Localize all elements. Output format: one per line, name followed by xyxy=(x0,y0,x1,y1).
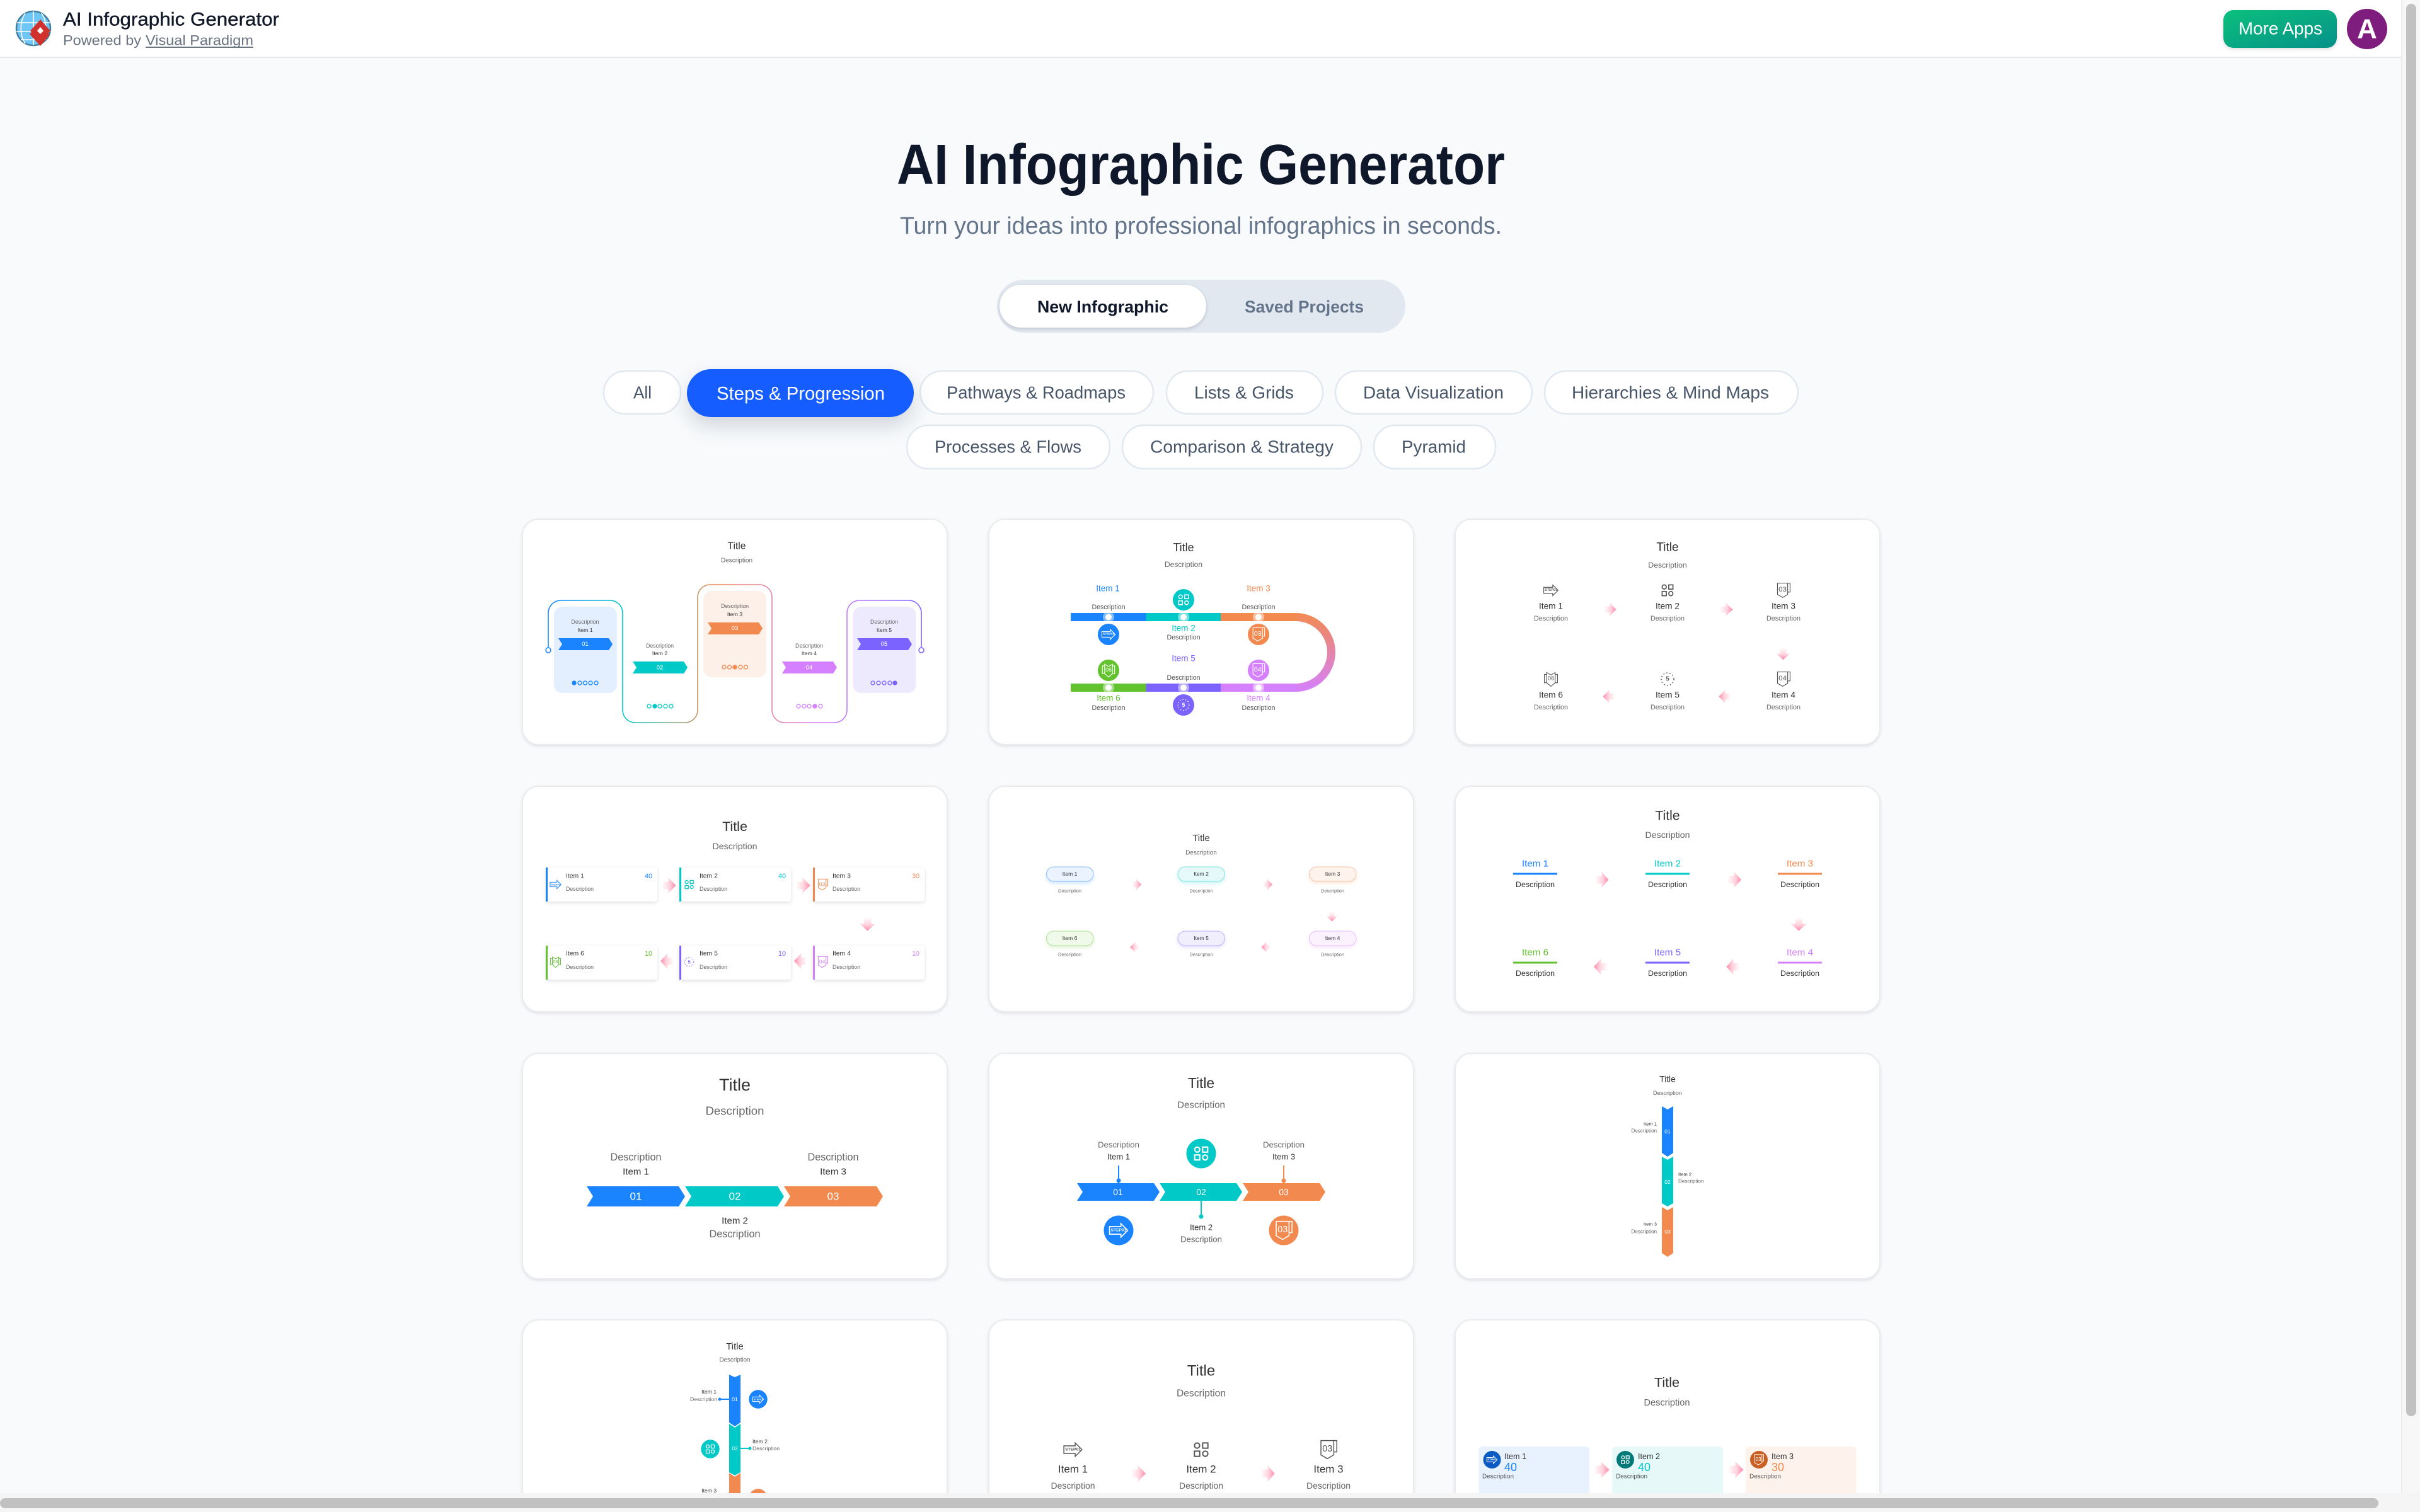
chip: Data Visualization xyxy=(1335,371,1532,414)
panel: template 1 serpentine cards xyxy=(522,519,947,745)
item labels: Item 4 xyxy=(1247,693,1270,703)
mini card: item 3: Description xyxy=(833,886,860,892)
step 1: 01 xyxy=(582,641,589,648)
panel: template 8 chevrons with icons xyxy=(989,1053,1414,1279)
step 1 xyxy=(558,619,613,685)
mini card: item 6: Item 6 xyxy=(566,950,584,958)
item 2 label: Description xyxy=(710,1228,760,1240)
icon: 03 badge: 03 xyxy=(1254,630,1262,638)
pill: item 6 xyxy=(1046,931,1093,958)
template title: Title xyxy=(1192,833,1210,844)
item 3: Item 3 xyxy=(1787,858,1813,869)
item 1 label: Description xyxy=(1631,1128,1657,1134)
step 1: Item 1 xyxy=(577,627,593,633)
metric card: item 2: Description xyxy=(1616,1473,1647,1480)
template description: Description xyxy=(1165,560,1202,569)
powered by line: Visual Paradigm xyxy=(146,33,253,48)
mini card: item 1: Description xyxy=(566,886,594,892)
mini card: item 4: Description xyxy=(833,964,860,970)
item labels: Item 3 xyxy=(1772,601,1795,611)
item 2 label xyxy=(740,1438,780,1452)
step 3: 03 xyxy=(732,625,738,632)
template title: Title xyxy=(719,1075,751,1094)
step 2: Item 2 xyxy=(652,650,667,656)
icon: app logo globe xyxy=(16,11,50,46)
item 1 label: Description xyxy=(611,1152,661,1163)
icon: grid badge xyxy=(1173,589,1194,610)
pill: item 2: Item 2 xyxy=(1194,871,1209,877)
mini card: item 1 xyxy=(546,868,657,902)
item 3: Description xyxy=(1780,880,1819,889)
chevron row: 03 xyxy=(827,1191,839,1202)
item 3 label: Description xyxy=(1631,1228,1657,1235)
mini card: item 1: 40 xyxy=(645,873,652,880)
chevron row xyxy=(1077,1183,1325,1201)
metric card: item 2 xyxy=(1612,1446,1723,1503)
more apps button: More Apps xyxy=(2238,19,2322,38)
horizontal scrollbar xyxy=(0,1493,2420,1512)
icon: step badge: STEP01 xyxy=(1111,1228,1127,1232)
vertical chevron column xyxy=(729,1375,740,1512)
item 2 label: Description xyxy=(1678,1178,1704,1184)
icon: 5 dashed badge: 5 xyxy=(1182,702,1185,708)
item 2 label: Item 2 xyxy=(1678,1172,1691,1177)
panel: template 9 vertical chevrons xyxy=(1455,1053,1880,1279)
item 1 label: Item 1 xyxy=(701,1389,717,1395)
chip: Pathways & Roadmaps: Pathways & Roadmaps xyxy=(947,383,1126,402)
inner tinted panels xyxy=(554,591,916,693)
item labels: Item 5 xyxy=(1172,654,1196,663)
panel: template 11 icon row xyxy=(989,1320,1414,1512)
item labels: Item 3 xyxy=(1247,583,1270,593)
item 1 callout xyxy=(1098,1140,1139,1183)
metric card: item 3: 03 xyxy=(1755,1457,1761,1462)
mini card: item 6: 06 xyxy=(553,959,558,965)
icon: 06 badge xyxy=(1098,660,1119,681)
icon: 03 badge xyxy=(1777,583,1790,597)
pill: item 3 xyxy=(1310,867,1356,893)
panel: template 4 bar cards with values xyxy=(522,786,947,1012)
chip: Pyramid xyxy=(1374,425,1495,469)
template title: Title xyxy=(1173,541,1194,554)
item 1 label xyxy=(690,1389,729,1402)
item 3 xyxy=(1306,1441,1351,1491)
icon: 03 badge xyxy=(1269,1216,1298,1245)
template description: Description xyxy=(705,1104,764,1118)
item labels: Description xyxy=(1651,704,1685,711)
item 3 label xyxy=(1631,1221,1657,1235)
icon: grid badge xyxy=(701,1440,720,1458)
item labels: Description xyxy=(1534,615,1568,622)
panel: template 12 tinted metric cards xyxy=(1455,1320,1880,1512)
icon: 5 dashed: 5 xyxy=(1666,675,1669,683)
step 3: Item 3 xyxy=(727,611,742,617)
icon: step arrow badge xyxy=(1098,624,1119,645)
pill: item 4: Description xyxy=(1321,951,1344,958)
pill: item 4: Item 4 xyxy=(1325,935,1340,941)
step 2: Description xyxy=(646,643,674,649)
item 1 callout: Item 1 xyxy=(1107,1152,1130,1162)
template title: Title xyxy=(728,541,746,552)
item 3: Description xyxy=(1306,1480,1351,1491)
template description: Description xyxy=(1644,1398,1690,1408)
metric card: item 1: STEP01 xyxy=(1488,1458,1496,1461)
vertical chevron column: 02 xyxy=(732,1445,738,1452)
item 5: Item 5 xyxy=(1654,948,1681,958)
chevron row: 01 xyxy=(1113,1187,1123,1197)
pill: item 6: Item 6 xyxy=(1063,935,1078,941)
metric card: item 2: Item 2 xyxy=(1638,1452,1660,1461)
item labels: Description xyxy=(1766,615,1801,622)
item 3 callout xyxy=(1263,1140,1305,1183)
chip: Processes & Flows: Processes & Flows xyxy=(935,437,1081,456)
mini card: item 5: Description xyxy=(700,964,727,970)
metric card: item 3: Item 3 xyxy=(1772,1452,1794,1461)
item labels: Description xyxy=(1092,704,1126,712)
vertical chevron column xyxy=(1662,1106,1673,1257)
mini card: item 2: Item 2 xyxy=(700,873,718,879)
item 1 xyxy=(1513,858,1557,889)
powered by line xyxy=(63,33,253,48)
chip: Steps & Progression active xyxy=(687,369,914,417)
chip: All xyxy=(604,371,681,414)
icon: 03 badge xyxy=(749,1489,768,1508)
item labels: Description xyxy=(1651,615,1685,622)
icon: 06 badge: 06 xyxy=(1105,667,1112,673)
item 3 callout: Item 3 xyxy=(1272,1152,1295,1162)
tab switcher: Saved Projects xyxy=(1245,297,1364,316)
chip: Pathways & Roadmaps xyxy=(920,371,1153,414)
category filter chips xyxy=(604,369,1798,469)
icon: step arrow: STEP01 xyxy=(1545,588,1557,592)
icon: 03 badge: 03 xyxy=(1778,586,1787,593)
metric card: item 2: 40 xyxy=(1638,1461,1651,1474)
item labels: Description xyxy=(1167,634,1201,641)
arrows between items xyxy=(1131,1466,1274,1481)
mini card: item 2 xyxy=(679,868,791,902)
item 3 label xyxy=(808,1152,858,1177)
vertical chevron column: 01 xyxy=(732,1396,738,1402)
chip: Comparison & Strategy: Comparison & Strategy xyxy=(1150,437,1334,456)
step 2 xyxy=(633,643,688,708)
pill: item 3: Description xyxy=(1321,888,1344,893)
item 2: Item 2 xyxy=(1186,1463,1216,1475)
mini card: item 3: 30 xyxy=(912,873,919,880)
pill: item 3: Item 3 xyxy=(1325,871,1340,877)
arrows between cards xyxy=(1594,1462,1743,1477)
item 4: Item 4 xyxy=(1787,948,1813,958)
icon: 04 badge xyxy=(1248,660,1269,681)
item 1 label xyxy=(1631,1121,1657,1134)
item 1 label: Item 1 xyxy=(623,1167,649,1177)
mini card: item 1: STEP01 xyxy=(551,883,561,886)
arrows between cards xyxy=(660,878,875,968)
item labels: Description xyxy=(1766,704,1801,711)
item labels: Item 1 xyxy=(1539,601,1563,611)
template description: Description xyxy=(713,842,757,852)
template title: Title xyxy=(722,819,747,834)
vertical chevron column: 03 xyxy=(1664,1228,1671,1235)
step 4: Item 4 xyxy=(802,650,817,656)
chip: Pyramid: Pyramid xyxy=(1402,437,1466,456)
step 1: Description xyxy=(571,619,599,625)
step 4 xyxy=(782,643,837,708)
step 5: 05 xyxy=(881,641,887,648)
pill: item 5: Description xyxy=(1190,951,1213,958)
metric card: item 1: Item 1 xyxy=(1504,1452,1526,1461)
U-shaped coloured track xyxy=(1071,611,1331,693)
mini card: item 2: 40 xyxy=(778,873,786,880)
item labels: Description xyxy=(1092,604,1126,611)
item labels: Description xyxy=(1534,704,1568,711)
icon: step badge: STEP01 xyxy=(754,1398,763,1400)
item 1 xyxy=(1051,1443,1095,1491)
arrows between pills xyxy=(1131,879,1337,952)
icon: grid xyxy=(1662,585,1673,596)
template title: Title xyxy=(726,1342,744,1352)
icon: step badge xyxy=(1104,1216,1133,1245)
chevron row xyxy=(587,1186,883,1206)
app name: AI Infographic Generator xyxy=(63,9,279,30)
pill: item 1 xyxy=(1046,867,1093,893)
chevron row: 01 xyxy=(630,1191,642,1202)
vertical chevron column: 01 xyxy=(1664,1128,1671,1135)
mini card: item 5: Item 5 xyxy=(700,950,718,958)
icon: 03 badge: 03 xyxy=(1277,1225,1288,1235)
chip: Lists & Grids xyxy=(1167,371,1323,414)
panel: template 3 icon grid with arrows xyxy=(1455,519,1880,745)
template description: Description xyxy=(1177,1100,1225,1110)
mini card: item 4: 10 xyxy=(912,950,919,958)
vertical chevron column: 02 xyxy=(1664,1179,1671,1185)
item 2: Item 2 xyxy=(1654,858,1681,869)
template description: Description xyxy=(1648,561,1687,570)
mini card: item 3: Item 3 xyxy=(833,873,851,879)
subtitle: Turn your ideas into professional infographics in seconds. xyxy=(900,213,1502,239)
item labels: Description xyxy=(1242,704,1276,712)
icon: step badge xyxy=(749,1390,768,1409)
user avatar xyxy=(2347,9,2387,49)
template title: Title xyxy=(1656,541,1679,554)
template description: Description xyxy=(1185,849,1217,857)
item 1 label: Description xyxy=(690,1396,717,1402)
step 4: 04 xyxy=(806,664,812,672)
item 3 label: Description xyxy=(808,1152,858,1163)
template title: Title xyxy=(1655,809,1680,823)
mini card: item 5: 5 xyxy=(688,959,691,965)
item 2 callout: Item 2 xyxy=(1190,1222,1213,1232)
item labels: Item 4 xyxy=(1772,690,1795,699)
icon: step arrow xyxy=(1544,585,1558,596)
arrows between items xyxy=(1603,604,1789,702)
item 2 label: Item 2 xyxy=(752,1438,768,1445)
mini card: item 4: Item 4 xyxy=(833,950,851,958)
mini card: item 5: 10 xyxy=(778,950,786,958)
item 1: STEP01 xyxy=(1065,1448,1081,1452)
pill: item 5 xyxy=(1178,931,1225,958)
step 3: Description xyxy=(721,603,749,609)
metric card: item 3: Description xyxy=(1749,1473,1781,1480)
item 2 label: Item 2 xyxy=(722,1216,748,1226)
arrows between items xyxy=(1594,873,1806,974)
item 1 label: Item 1 xyxy=(1644,1121,1657,1126)
item 6: Description xyxy=(1516,969,1555,978)
item 1: Item 1 xyxy=(1058,1463,1088,1475)
mini card: item 3 xyxy=(813,868,925,902)
item 3 callout: Description xyxy=(1263,1140,1305,1149)
item labels: Item 2 xyxy=(1172,624,1196,633)
header bar xyxy=(0,0,2401,58)
chip: Hierarchies & Mind Maps: Hierarchies & Mind Maps xyxy=(1572,383,1769,402)
template title: Title xyxy=(1187,1362,1215,1380)
panel: template 7 simple chevrons xyxy=(522,1053,947,1279)
item 2 label xyxy=(1678,1172,1704,1184)
tab switcher: New Infographic xyxy=(1037,297,1168,316)
template description: Description xyxy=(1645,830,1690,840)
mini card: item 6: 10 xyxy=(645,950,652,958)
item 3: Item 3 xyxy=(1313,1463,1344,1475)
step 5: Item 5 xyxy=(877,627,892,633)
pill: item 4 xyxy=(1310,931,1356,958)
pill: item 5: Item 5 xyxy=(1194,935,1209,941)
chevron row: 02 xyxy=(729,1191,740,1202)
template title: Title xyxy=(1188,1075,1214,1091)
main heading: AI Infographic Generator xyxy=(897,134,1505,197)
mini card: item 2: Description xyxy=(700,886,727,892)
metric card: item 1: Description xyxy=(1482,1473,1514,1480)
item 3 label: Item 3 xyxy=(820,1167,846,1177)
template title: Title xyxy=(1659,1075,1676,1084)
item 1 label xyxy=(611,1152,661,1177)
item 3 xyxy=(1778,858,1822,889)
item 1 callout: Description xyxy=(1098,1140,1139,1149)
tab switcher xyxy=(997,280,1405,333)
item 2 callout: Description xyxy=(1180,1235,1222,1244)
item 3: 03 xyxy=(1322,1444,1332,1454)
item labels: Item 6 xyxy=(1097,693,1121,703)
icon: 03 badge xyxy=(1248,624,1269,645)
item 2 xyxy=(1645,858,1690,889)
step 2: 02 xyxy=(657,664,663,672)
item 5: Description xyxy=(1648,969,1687,978)
item labels: Description xyxy=(1167,674,1201,682)
item 2 callout xyxy=(1180,1201,1222,1244)
item labels: Item 2 xyxy=(1656,601,1680,611)
item 3 label: Item 3 xyxy=(1644,1221,1657,1227)
chip: Processes & Flows xyxy=(907,425,1110,469)
icon: 06 badge: 06 xyxy=(1548,675,1554,682)
icon: step arrow badge: STEP01 xyxy=(1103,632,1114,636)
more apps button xyxy=(2223,10,2337,48)
panel: template 2 U-shaped track xyxy=(989,519,1414,745)
chip: Hierarchies & Mind Maps xyxy=(1545,371,1798,414)
item 6: Item 6 xyxy=(1522,948,1548,958)
item labels: Item 5 xyxy=(1656,690,1680,699)
panel: template 10 vertical chevrons with icons xyxy=(522,1320,947,1512)
icon: 04 badge: 04 xyxy=(1778,675,1787,682)
mini card: item 4: 04 xyxy=(819,958,826,965)
item 4 xyxy=(1778,948,1822,978)
chip: Lists & Grids: Lists & Grids xyxy=(1194,383,1294,402)
mini card: item 1: Item 1 xyxy=(566,873,584,879)
step 5 xyxy=(857,619,912,685)
icon: 06 badge xyxy=(1545,673,1557,686)
vertical scrollbar xyxy=(2401,0,2420,1512)
step 3 xyxy=(708,603,763,669)
icon: 5 dashed xyxy=(1661,673,1674,685)
item 3 label: Item 3 xyxy=(701,1487,717,1494)
chip: Comparison & Strategy xyxy=(1122,425,1361,469)
item 2: Description xyxy=(1179,1480,1223,1491)
mini card: item 6: Description xyxy=(566,964,594,970)
powered by line: Powered by xyxy=(63,33,141,48)
item 1: Description xyxy=(1051,1480,1095,1491)
chevron row: 03 xyxy=(1279,1187,1289,1197)
template title: Title xyxy=(1654,1375,1680,1390)
item 2: Description xyxy=(1648,880,1687,889)
item labels: Description xyxy=(1242,604,1276,611)
item 6 xyxy=(1513,948,1557,978)
item labels xyxy=(1092,583,1276,712)
chip: Steps & Progression active: Steps & Progression xyxy=(717,383,885,404)
mini card: item 6 xyxy=(546,946,657,980)
metric card: item 1: 40 xyxy=(1504,1461,1517,1474)
icon: 04 badge: 04 xyxy=(1254,666,1262,673)
icon: 04 badge xyxy=(1777,672,1790,686)
template description: Description xyxy=(1177,1389,1226,1399)
item labels: Item 1 xyxy=(1096,583,1120,593)
template description: Description xyxy=(721,557,752,564)
chip: Data Visualization: Data Visualization xyxy=(1363,383,1504,402)
template description: Description xyxy=(1653,1090,1682,1096)
item 2 label: Description xyxy=(752,1445,780,1452)
icon: grid badge xyxy=(1186,1139,1216,1168)
pill: item 6: Description xyxy=(1058,951,1081,958)
panel: template 6 underlined items xyxy=(1455,786,1880,1012)
item 2 label xyxy=(710,1216,760,1240)
user avatar: A xyxy=(2357,14,2377,44)
metric card: item 3: 30 xyxy=(1772,1461,1784,1474)
icon: 5 dashed badge xyxy=(1173,694,1194,716)
item labels: Item 6 xyxy=(1539,690,1563,699)
pill: item 2 xyxy=(1178,867,1225,893)
chip: All: All xyxy=(633,383,652,402)
metric card: item 1 xyxy=(1478,1446,1589,1503)
step 5: Description xyxy=(870,619,898,625)
pill: item 1: Item 1 xyxy=(1063,871,1078,877)
item labels xyxy=(1534,601,1801,711)
item 5 xyxy=(1645,948,1690,978)
serpentine gradient line xyxy=(546,585,924,723)
item 1: Item 1 xyxy=(1522,858,1548,869)
template description: Description xyxy=(719,1357,751,1363)
step 4: Description xyxy=(795,643,823,649)
mini card: item 5 xyxy=(679,946,791,980)
item 2 xyxy=(1179,1443,1223,1491)
item 4: Description xyxy=(1780,969,1819,978)
metric card: item 3 xyxy=(1746,1446,1857,1503)
pill: item 2: Description xyxy=(1190,888,1213,893)
pill: item 1: Description xyxy=(1058,888,1081,893)
mini card: item 4 xyxy=(813,946,925,980)
item 1: Description xyxy=(1516,880,1555,889)
chevron row: 02 xyxy=(1196,1187,1206,1197)
mini card: item 3: 03 xyxy=(819,881,826,887)
panel: template 5 pill nodes xyxy=(989,786,1414,1012)
